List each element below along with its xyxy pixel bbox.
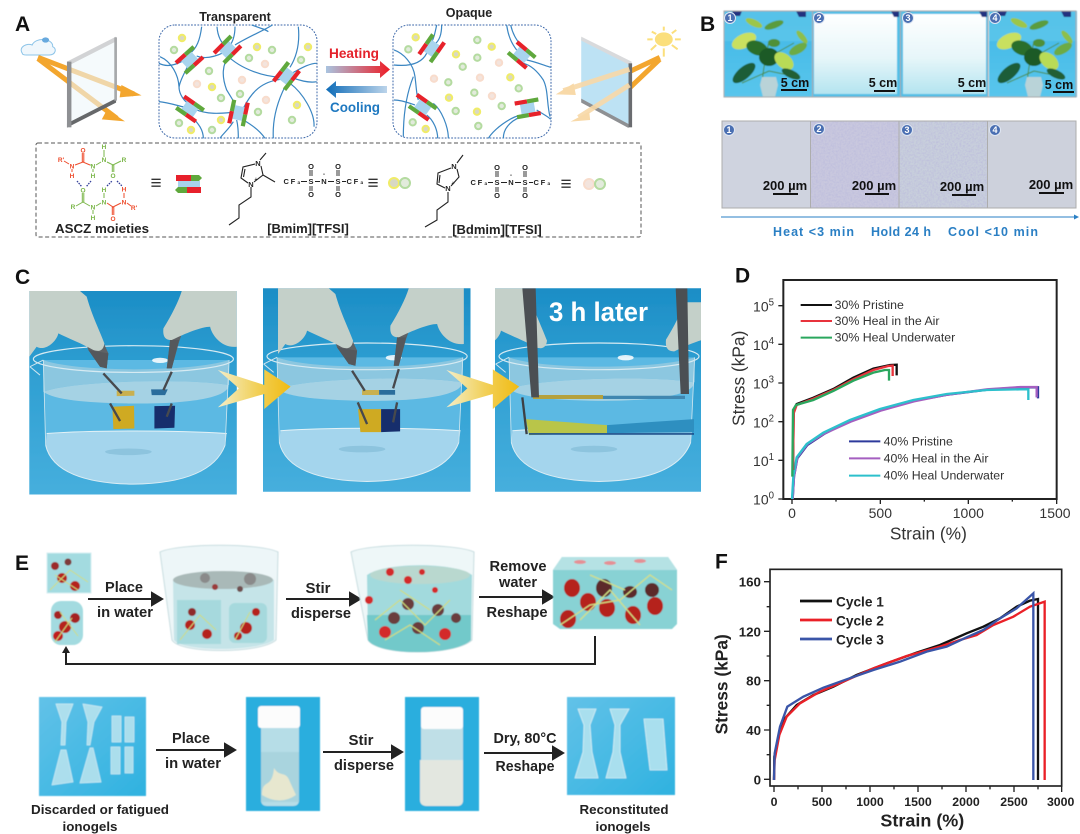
curve: cycle 2 [774, 602, 1045, 780]
heading: C: C [15, 266, 30, 289]
photo: vial with gels [246, 697, 320, 811]
illustration: large cube [553, 557, 677, 629]
diagram: transparent network [159, 25, 317, 138]
y tick labels: 10 [753, 492, 769, 508]
arrow: chevron 2 [446, 369, 519, 409]
heading: E: E [15, 552, 29, 575]
x tick labels: 500 [812, 795, 832, 809]
label: Place in water [165, 730, 221, 772]
text: Bdmim atoms: N [451, 162, 457, 171]
formula: TFSI anion 1: S [335, 177, 341, 186]
structure: ASCZ moiety: N [70, 164, 75, 170]
structure: ASCZ moiety: H [91, 173, 96, 180]
scale bars: 5 cm: 5 cm [1045, 78, 1073, 92]
y tick labels: 5 [769, 297, 774, 308]
y tick labels [753, 297, 775, 508]
label: Heat under 3 min: Heat <3 min [773, 225, 854, 239]
label: 3 h later: 3 h later [549, 297, 648, 327]
text: Bdmim atoms: N [445, 184, 451, 193]
structure: ASCZ moiety: H [102, 187, 107, 194]
panel B [700, 11, 1079, 239]
photo strip: plant behind film [724, 11, 1077, 97]
text: Bmim atoms: N [255, 159, 261, 168]
label: Stir disperse: disperse [334, 757, 394, 774]
panel C [15, 266, 739, 505]
formula: TFSI anion 1: N [321, 177, 327, 186]
icon: clear window with light rays [38, 37, 142, 128]
crosslink moieties [175, 35, 301, 127]
plot frame [783, 280, 1057, 499]
panel F: cyclic stress-strain chart [711, 551, 1075, 830]
label: Bmim TFSI: [Bmim][TFSI] [267, 221, 349, 236]
structure: ASCZ moiety: N [122, 200, 127, 206]
formula: TFSI anion 1: S [308, 177, 314, 186]
label: Dry 80C Reshape [494, 730, 557, 775]
x axis title: Strain (%) [890, 523, 967, 543]
number badges: top row [724, 12, 1000, 24]
curve: cycle 1 [774, 599, 1038, 780]
heading: A: A [15, 13, 30, 36]
icon: moiety symbol [175, 175, 202, 193]
number badges: top row: 3 [905, 13, 911, 23]
label: Bdmim TFSI: [Bdmim][TFSI] [452, 222, 542, 237]
structure: ASCZ moiety: R' [58, 157, 65, 164]
axis ticks [764, 582, 1062, 792]
label: Dry 80C Reshape: Reshape [496, 758, 554, 775]
y tick labels: 80 [746, 674, 761, 689]
scale bars: 5 cm: 5 cm [869, 76, 897, 90]
scale bars: 5 cm [781, 76, 1074, 93]
formula: TFSI anion 2: O [494, 163, 500, 172]
icon: Bdmim ion pair [584, 179, 605, 189]
formula: TFSI anion 2: N [508, 178, 514, 187]
structure: ASCZ moiety: O [110, 216, 116, 223]
heading: F: F [715, 551, 728, 574]
formula: TFSI anion 1: O [335, 162, 341, 171]
legend: 40 percent [849, 435, 1004, 483]
panel A [15, 6, 681, 237]
formula: TFSI anion 2: - [510, 173, 512, 179]
structure: ASCZ moiety: N [102, 157, 107, 164]
structure: ASCZ moiety: R [71, 204, 76, 211]
text: Bdmim atoms: + [452, 181, 455, 187]
y tick labels: 160 [739, 575, 761, 590]
number badges: bottom row [724, 124, 1000, 136]
label: Stir disperse: Stir [306, 580, 331, 597]
y tick labels: 2 [769, 413, 774, 424]
label: Remove water Reshape [486, 558, 548, 621]
structure: ASCZ moiety: O [80, 148, 86, 154]
formula: TFSI anion 2: S [522, 178, 528, 187]
y tick labels: 4 [769, 336, 775, 347]
panel D: log stress-strain chart [728, 265, 1071, 543]
y tick labels [739, 575, 761, 787]
label: Dry 80C Reshape: Dry, 80°C [494, 730, 557, 747]
legend: 40 percent: 40% Heal in the Air [884, 452, 989, 466]
formula: TFSI anion 1: CF₃ [284, 177, 301, 186]
formula: TFSI anion 1: O [308, 190, 314, 199]
label: Stir disperse [291, 580, 351, 622]
crosslink moieties [408, 33, 541, 122]
micrograph strip [722, 121, 1076, 208]
symbol: equivalent: ≡ [367, 173, 379, 194]
arrow: heating [326, 61, 390, 78]
structure: Bdmim cation [425, 155, 463, 227]
scale bars: 5 cm: 5 cm [958, 76, 986, 90]
number badges: top row: 2 [816, 13, 822, 23]
formula: TFSI anion 2: CF₃ [534, 178, 551, 187]
y axis title: Stress (kPa) [711, 634, 731, 734]
label: Transparent: Transparent [199, 10, 272, 24]
y tick labels: 10 [753, 376, 769, 392]
curves: 40 percent [792, 387, 1038, 499]
structure: ASCZ moiety: O [80, 188, 86, 194]
scale bars: 200 um: 200 µm [763, 178, 807, 193]
structure: ASCZ moiety: H [70, 173, 75, 180]
y tick labels: 10 [753, 414, 769, 430]
number badges: bottom row: 4 [992, 125, 998, 135]
text: Bdmim atoms [445, 162, 457, 193]
formula: TFSI anion 2: S [494, 178, 500, 187]
icon: Bmim ion pair [389, 178, 410, 188]
y tick labels: 1 [769, 452, 774, 463]
label: Cool under 10 min: Cool <10 min [948, 225, 1038, 239]
photo: vial with dispersion [405, 697, 479, 811]
x tick labels: 3000 [1047, 795, 1075, 809]
panel: chemical structure legend [36, 143, 641, 237]
structure: ASCZ moiety: H [122, 186, 127, 194]
icon: sun [647, 27, 681, 57]
y tick labels: 10 [753, 337, 769, 353]
photo 2: gels in contact [263, 288, 470, 492]
x tick labels [771, 795, 1075, 809]
formula: TFSI anion 1: CF₃ [346, 177, 364, 186]
structure: ASCZ moiety: O [110, 173, 116, 180]
number badges: bottom row: 2 [816, 124, 822, 134]
caption: discarded or fatigued ionogels: Discarded or fatigued [31, 802, 169, 817]
legend: Cycle 1 [836, 594, 884, 609]
structure: ASCZ moiety: H [91, 215, 96, 222]
formula: TFSI anion 1: - [323, 172, 325, 178]
photo: reconstituted ionogels [567, 697, 675, 795]
arrow: place in water [88, 593, 162, 605]
photo: discarded ionogels [39, 697, 146, 796]
illustration: beaker with gels [160, 545, 278, 650]
formula: TFSI anion 2: O [494, 191, 500, 200]
label: Stir disperse [334, 732, 394, 774]
structure: ASCZ moiety: N [102, 200, 107, 206]
number badges: bottom row: 3 [904, 125, 910, 135]
number badges: top row: 1 [727, 13, 733, 23]
scale bars: 200 um: 200 µm [852, 178, 896, 193]
number badges: top row: 4 [992, 13, 998, 23]
label: Stir disperse: disperse [291, 605, 351, 622]
symbol: equivalent: ≡ [560, 174, 572, 195]
legend [800, 594, 884, 647]
arrow: chevron 1 [218, 369, 291, 409]
structure: ASCZ moiety: N [91, 164, 96, 170]
structure: ASCZ moiety: H [102, 144, 107, 151]
y axis title: Stress (kPa) [728, 331, 748, 426]
arrow: remove water reshape [479, 591, 553, 603]
x tick labels: 0 [788, 505, 796, 521]
label: ASCZ moieties: ASCZ moieties [55, 221, 149, 236]
caption: reconstituted ionogels [580, 802, 669, 834]
formula: TFSI anion 1: O [308, 162, 314, 171]
formula: TFSI anion 2 [470, 163, 551, 200]
ions in opaque network [405, 34, 522, 132]
caption: reconstituted ionogels: Reconstituted [580, 802, 669, 817]
arrow: place in water [156, 744, 235, 756]
text: Bmim atoms [248, 159, 261, 189]
icon: opaque window with faded rays [556, 37, 660, 128]
scale bars: 200 um [763, 177, 1073, 196]
formula: TFSI anion 2: CF₃ [470, 178, 488, 187]
formula: TFSI anion 2: O [522, 191, 528, 200]
x tick labels: 1000 [953, 505, 984, 521]
arrow: recycle loop [62, 636, 595, 664]
arrow: dry reshape [484, 747, 563, 759]
symbol: equivalent: ≡ [150, 173, 162, 194]
scale bars: 200 um: 200 µm [940, 179, 984, 194]
caption: reconstituted ionogels: ionogels [596, 819, 650, 834]
label: Place in water: Place [172, 730, 210, 747]
number badges: bottom row: 1 [726, 125, 732, 135]
axis ticks [778, 306, 1057, 504]
y tick labels: 10 [753, 298, 769, 314]
label: Stir disperse: Stir [348, 732, 374, 749]
y tick labels: 0 [769, 491, 774, 502]
curves: 30 percent [792, 365, 897, 477]
y tick labels: 10 [753, 453, 769, 469]
structure: Bmim cation [229, 153, 275, 225]
legend: 30 percent [801, 298, 955, 345]
label: Place in water: in water [165, 755, 221, 772]
arrow: timeline [721, 214, 1079, 220]
icon: cloud [21, 37, 55, 55]
legend: 40 percent: 40% Pristine [884, 435, 953, 449]
label: Hold 24 h: Hold 24 h [871, 225, 931, 239]
legend: 40 percent: 40% Heal Underwater [884, 469, 1004, 483]
x tick labels: 0 [771, 795, 778, 809]
curve: cycle 3 [774, 593, 1033, 780]
label: Place in water [97, 579, 153, 621]
x tick labels: 500 [869, 505, 892, 521]
panel E [15, 545, 677, 834]
x tick labels: 1500 [904, 795, 932, 809]
legend: Cycle 2 [836, 613, 884, 628]
formula: TFSI anion 2: O [522, 163, 528, 172]
photo 1: separated gels [29, 291, 237, 494]
formula: TFSI anion 1: O [335, 190, 341, 199]
label: Cooling: Cooling [330, 99, 380, 115]
arrow: stir disperse [323, 746, 402, 758]
label: Remove water Reshape: Remove [490, 558, 546, 575]
illustration: small cube [47, 553, 91, 593]
label: Remove water Reshape: Reshape [486, 604, 548, 621]
photo 3: healed stretched gel [495, 288, 701, 492]
x axis title: Strain (%) [880, 810, 964, 830]
label: Place in water: Place [105, 579, 143, 596]
structure: ASCZ moiety [58, 144, 138, 223]
text: Bmim atoms: N [248, 180, 254, 189]
x tick labels [788, 505, 1071, 521]
label: Place in water: in water [97, 604, 153, 621]
label: Remove water Reshape: water [498, 574, 537, 591]
legend: Cycle 3 [836, 632, 884, 647]
y tick labels: 3 [769, 375, 774, 386]
ions in transparent network [171, 35, 311, 133]
structure: ASCZ moiety: R [122, 157, 127, 164]
illustration: beaker with dispersed gels [351, 545, 474, 652]
scale bars: 5 cm: 5 cm [781, 76, 809, 90]
legend: 30 percent: 30% Heal Underwater [835, 331, 955, 345]
formula: TFSI anion 1 [284, 162, 364, 199]
structure: ASCZ moiety: R' [131, 205, 138, 212]
illustration: small cylinder [51, 601, 83, 645]
diagram: opaque network [393, 25, 551, 138]
text: Bmim atoms: + [255, 177, 258, 183]
legend: 30 percent: 30% Heal in the Air [835, 314, 940, 328]
legend: 30 percent: 30% Pristine [835, 298, 904, 312]
plot frame [770, 569, 1062, 786]
x tick labels: 1000 [856, 795, 884, 809]
x tick labels: 1500 [1039, 505, 1071, 521]
label: Opaque: Opaque [446, 6, 492, 20]
arrow: stir disperse [286, 593, 360, 605]
scale bars: 200 um: 200 µm [1029, 177, 1073, 192]
x tick labels: 2000 [952, 795, 980, 809]
structure: ASCZ moiety: N [91, 204, 96, 212]
arrow: cooling [326, 81, 387, 98]
heading: B: B [700, 13, 715, 36]
caption: discarded or fatigued ionogels [31, 802, 169, 834]
x tick labels: 2500 [1000, 795, 1028, 809]
heading: D: D [735, 265, 750, 288]
caption: discarded or fatigued ionogels: ionogels [62, 819, 118, 834]
label: Heating: Heating [329, 45, 379, 61]
y tick labels: 40 [746, 723, 761, 738]
y tick labels: 0 [754, 772, 761, 787]
y tick labels: 120 [739, 624, 761, 639]
